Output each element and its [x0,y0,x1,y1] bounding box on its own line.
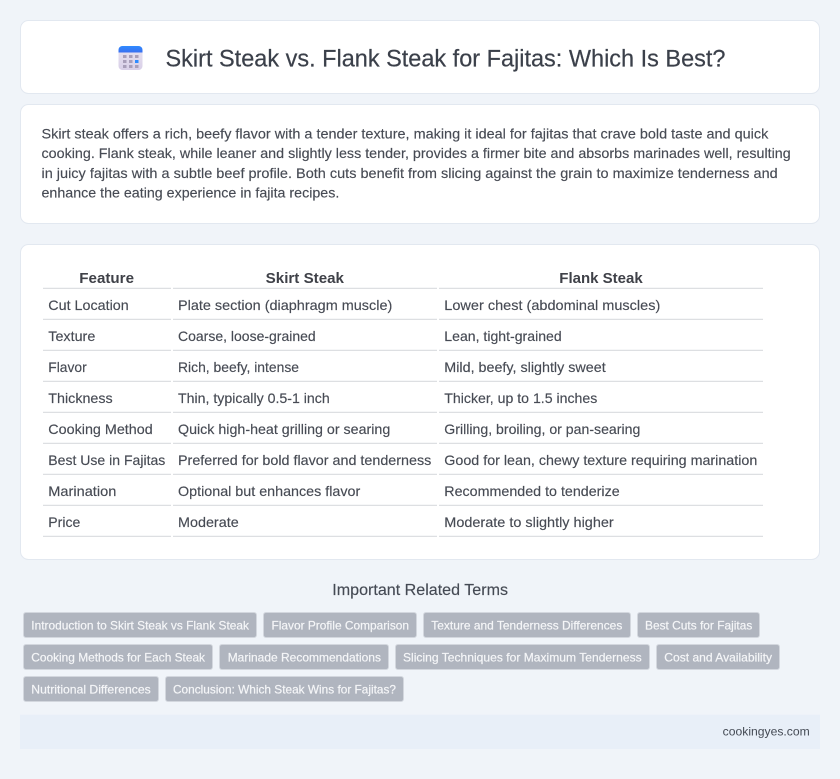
panel: title header [20,20,820,94]
tag: conclusion: Conclusion: Which Steak Wins for Fajitas? [173,682,396,696]
tag: flavor profile [264,612,416,638]
footer source text: cookingyes.com [723,725,810,739]
table row: marination: Optional but enhances flavor [178,483,361,499]
table row: best use in fajitas: Good for lean, chewy texture requiring marination [444,452,757,468]
table row: texture [43,328,763,350]
table row: cut location: Lower chest (abdominal muscles) [444,297,660,313]
table row: flavor: Flavor [48,359,87,375]
table row: cooking method [43,421,763,443]
tag: conclusion [166,676,404,702]
tag: introduction: Introduction to Skirt Steak vs Flank Steak [31,618,250,632]
table row: best use in fajitas [43,452,763,474]
panel: summary paragraph [20,104,820,224]
tag: best cuts: Best Cuts for Fajitas [645,618,752,632]
table row: flavor: Mild, beefy, slightly sweet [444,359,606,375]
text block: summary: in juicy fajitas with a subtle beef profile. Both cuts benefit from slicing against the grain to maximize tenderness and [42,165,778,181]
table row: cooking method: Quick high-heat grilling or searing [178,421,390,437]
tag: cooking methods [24,644,212,670]
table row: price: Moderate to slightly higher [444,514,614,530]
tag: slicing techniques: Slicing Techniques for Maximum Tenderness [403,650,642,664]
table header row [43,271,763,288]
tag: marinade [220,644,388,670]
table row: texture: Texture [48,328,96,344]
tag: slicing techniques [396,644,650,670]
table row: cut location: Cut Location [48,297,129,313]
tag: cost and availability [656,644,780,670]
panel: comparison table [20,244,820,560]
table row: best use in fajitas: Best Use in Fajitas [48,452,165,468]
table row: thickness: Thin, typically 0.5-1 inch [178,390,330,406]
table row: marination: Recommended to tenderize [444,483,620,499]
table row: best use in fajitas: Preferred for bold flavor and tenderness [178,452,431,468]
table row: thickness: Thicker, up to 1.5 inches [444,390,597,406]
table row: marination [43,483,763,505]
footer bar [20,715,820,749]
table row: marination: Marination [48,483,116,499]
text block: summary: enhance the eating experience in fajita recipes. [42,184,339,200]
tag: cooking methods: Cooking Methods for Each Steak [31,650,206,664]
tag: texture and tenderness [424,612,630,638]
related terms tags [24,612,780,702]
table row: price: Price [48,514,81,530]
table header row: Skirt Steak [266,271,345,287]
table header row: Feature [79,271,134,287]
tag: texture and tenderness: Texture and Tenderness Differences [431,618,622,632]
table row: thickness [43,390,763,412]
table row: cut location [43,297,763,319]
tag: best cuts [638,612,760,638]
table row: flavor [43,359,763,381]
text block: summary: Skirt steak offers a rich, beefy flavor with a tender texture, making it ideal for fajitas that crave bold taste and quick [42,126,769,142]
tag: flavor profile: Flavor Profile Comparison [272,618,409,632]
title: Skirt Steak vs. Flank Steak for Fajitas: Which Is Best? [166,46,726,72]
table row: cooking method: Grilling, broiling, or pan-searing [444,421,640,437]
heading: important related terms: Important Related Terms [332,582,508,599]
tag: marinade: Marinade Recommendations [228,650,381,664]
table row: cut location: Plate section (diaphragm muscle) [178,297,392,313]
table row: flavor: Rich, beefy, intense [178,359,299,375]
table header row: Flank Steak [559,271,644,287]
table row: texture: Lean, tight-grained [444,328,562,344]
tag: cost and availability: Cost and Availability [664,650,772,664]
table row: texture: Coarse, loose-grained [178,328,316,344]
table row: price [43,514,763,536]
text block: summary [42,126,791,200]
icon: calendar [118,46,142,70]
tag: nutritional differences: Nutritional Differences [31,682,151,696]
table row: thickness: Thickness [48,390,113,406]
table row: price: Moderate [178,514,239,530]
tag: introduction [24,612,256,638]
tag: nutritional differences [24,676,158,702]
text block: summary: cooking. Flank steak, while leaner and slightly less tender, provides a firmer bite and absorbs marinades well, resulting [42,145,791,161]
table row: cooking method: Cooking Method [48,421,153,437]
